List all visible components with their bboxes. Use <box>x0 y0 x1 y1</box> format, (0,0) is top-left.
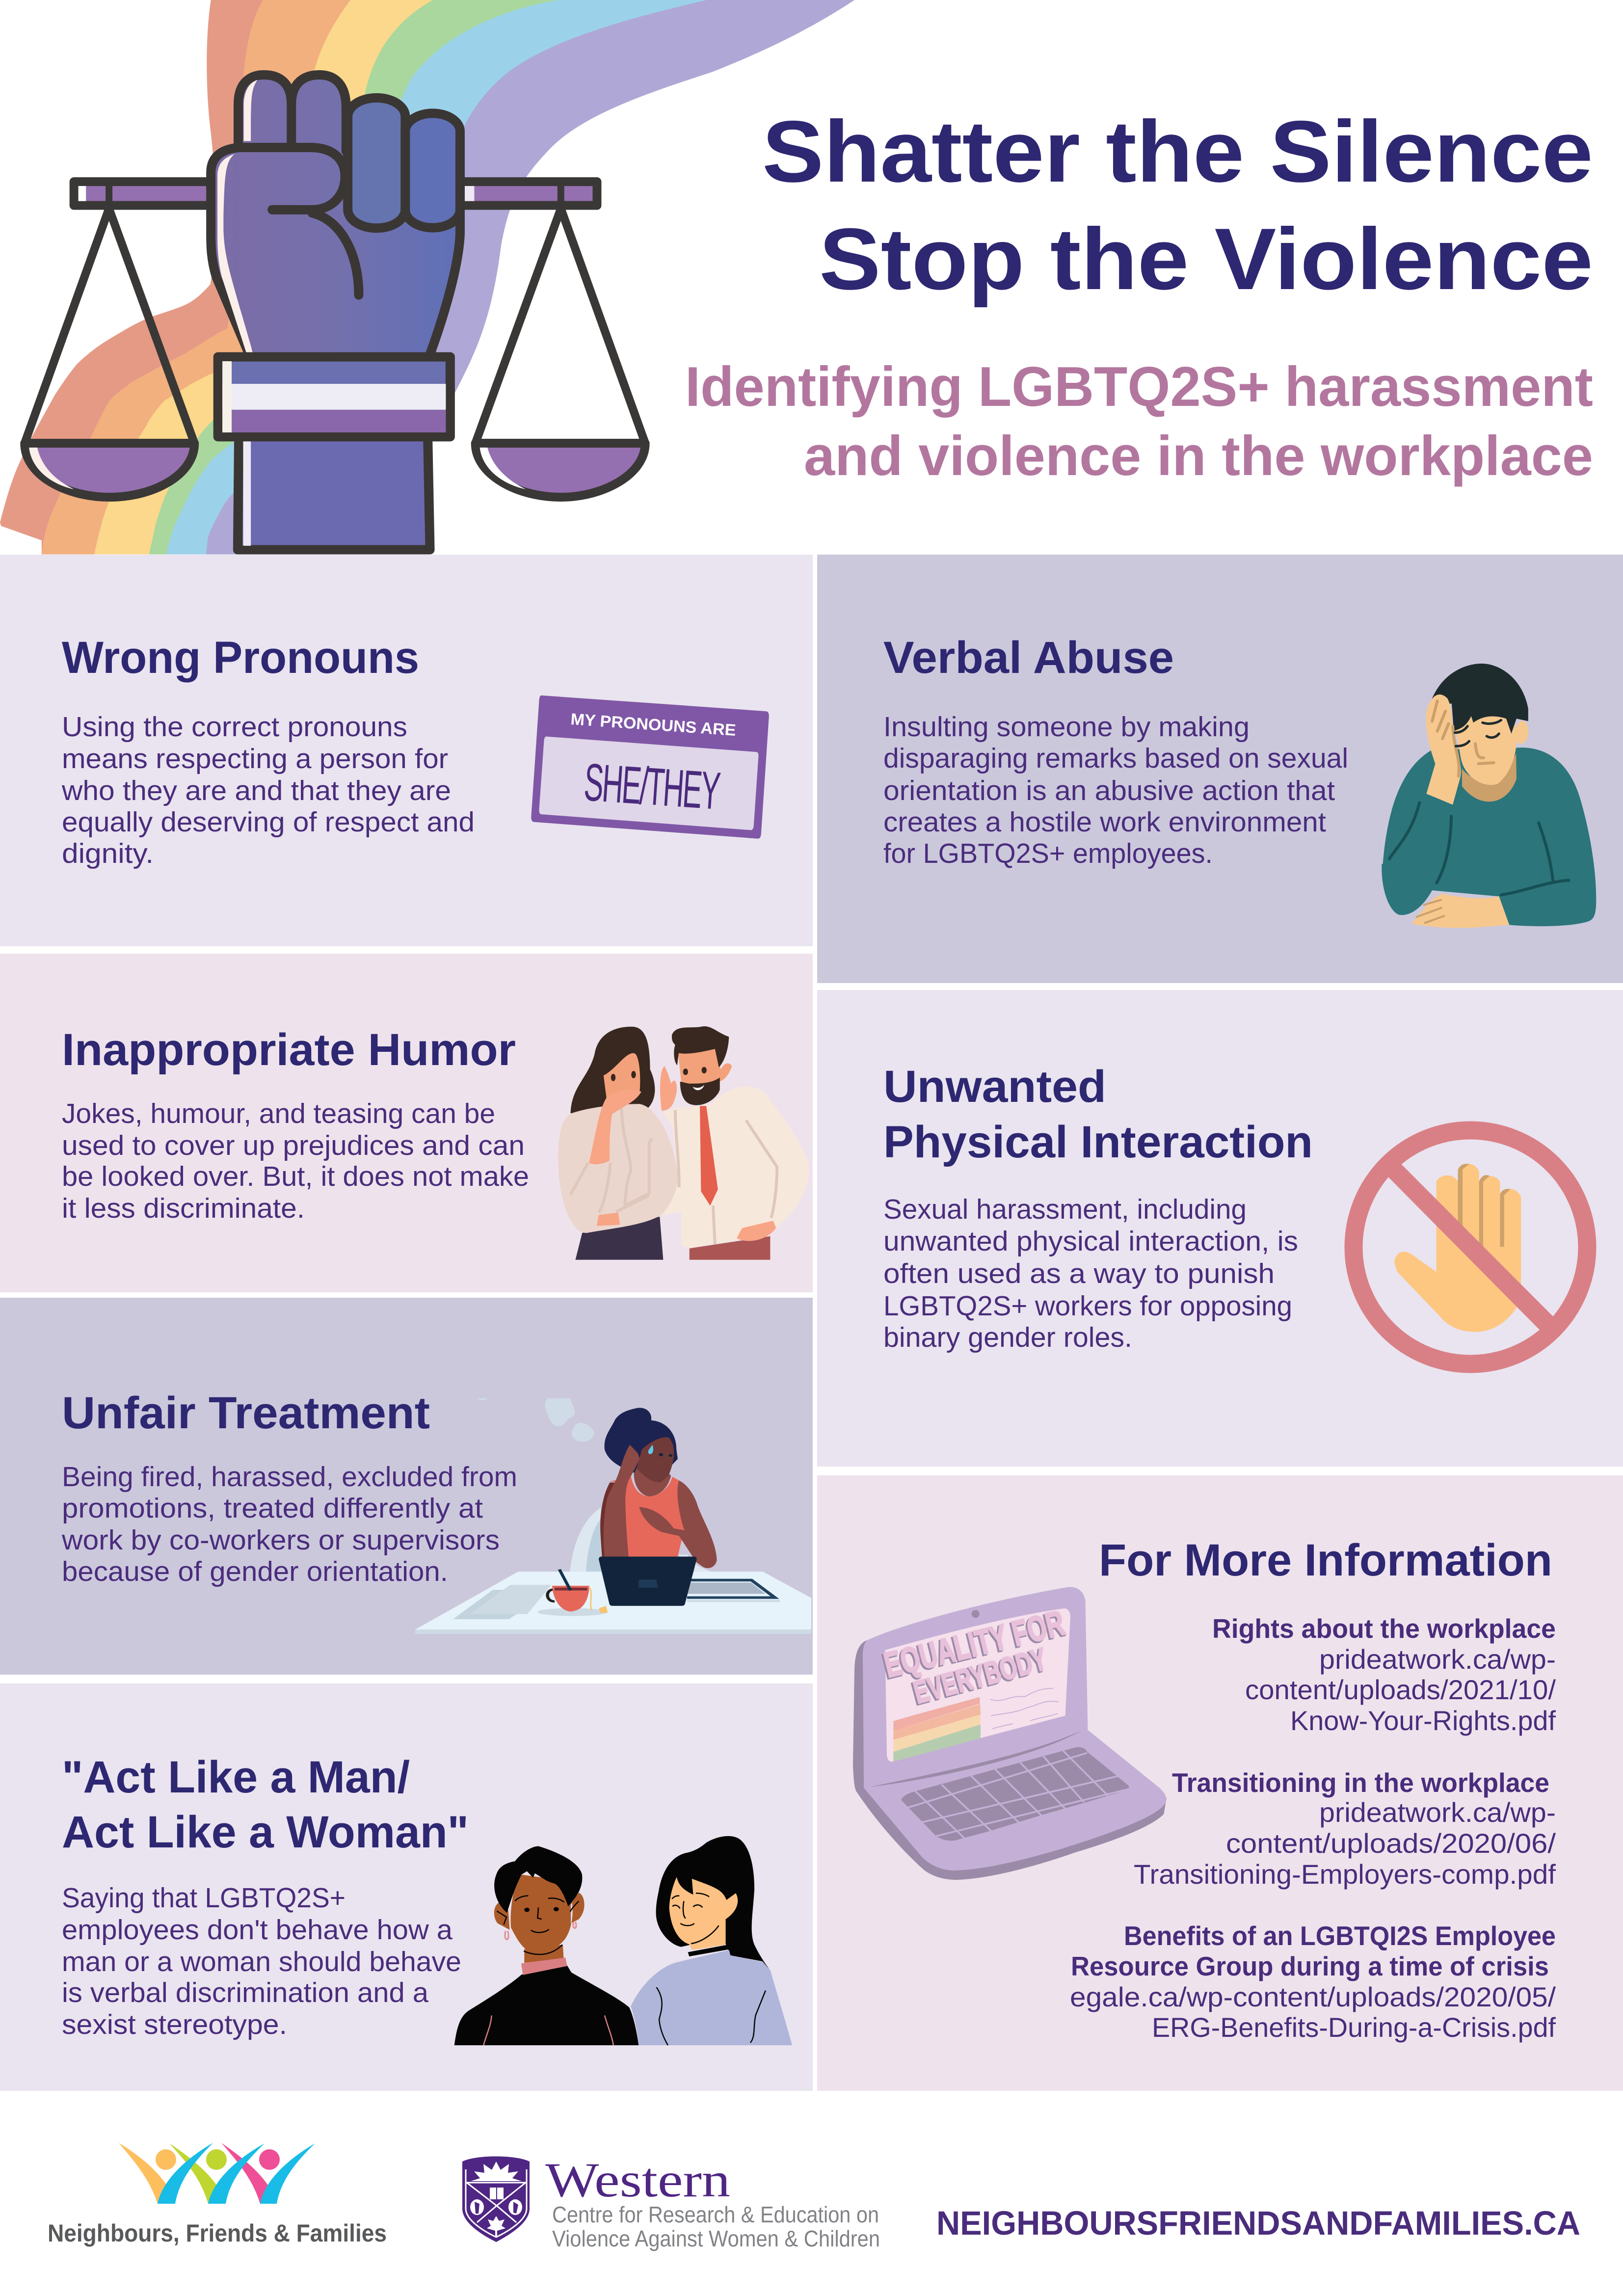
illustration: laptop with equality poster: EVERYBODY <box>908 1642 1049 1712</box>
icon: stop hand in prohibition sign <box>1354 1130 1587 1364</box>
resource: transitioning in the workplace: prideatwork.ca/wp- <box>1319 1797 1556 1828</box>
panel: unwanted physical interaction <box>817 990 1623 1467</box>
text: wrong pronouns: means respecting a person for <box>62 743 448 774</box>
resource: rights about the workplace: content/uploads/2021/10/ <box>1245 1674 1556 1705</box>
text: act like a man act like a woman: Saying that LGBTQ2S+ <box>62 1882 346 1914</box>
text: inappropriate humor: be looked over. But, it does not make <box>62 1161 529 1192</box>
heading: act like a man act like a woman: "Act Like a Man/ <box>62 1752 410 1802</box>
text: verbal abuse: creates a hostile work environment <box>883 806 1326 838</box>
heading: unwanted physical interaction <box>883 1062 1313 1167</box>
heading: unfair treatment: Unfair Treatment <box>62 1388 430 1438</box>
text: act like a man act like a woman: man or a woman should behave <box>62 1946 461 1977</box>
resource: rights about the workplace: Rights about the workplace <box>1212 1613 1556 1644</box>
text: act like a man act like a woman: sexist stereotype. <box>62 2009 287 2040</box>
resource: rights about the workplace: prideatwork.ca/wp- <box>1319 1644 1556 1675</box>
logo name: Neighbours, Friends & Families <box>48 2219 387 2247</box>
text: unfair treatment: promotions, treated differently at <box>62 1493 483 1524</box>
heading: act like a man act like a woman: Act Like a Woman" <box>62 1807 469 1857</box>
text: wrong pronouns: Using the correct pronouns <box>62 711 407 743</box>
text: unfair treatment: Being fired, harassed, excluded from <box>62 1461 517 1493</box>
text: wrong pronouns: dignity. <box>62 838 154 869</box>
heading: inappropriate humor: Inappropriate Humor <box>62 1025 516 1075</box>
heading: verbal abuse: Verbal Abuse <box>883 633 1174 683</box>
resource: benefits of an employee resource group <box>1070 1921 1556 2043</box>
text: unwanted physical interaction: binary gender roles. <box>883 1322 1132 1353</box>
logo mark <box>119 2143 315 2204</box>
illustration: two people <box>454 1836 792 2045</box>
resource: transitioning in the workplace: Transitioning in the workplace <box>1172 1767 1549 1798</box>
resource: transitioning in the workplace: content/uploads/2020/06/ <box>1226 1828 1556 1859</box>
subtitle <box>685 356 1593 487</box>
logo: neighbours friends and families <box>48 2143 387 2247</box>
text: act like a man act like a woman <box>62 1882 461 2040</box>
resource: benefits of an employee resource group: egale.ca/wp-content/uploads/2020/05/ <box>1070 1981 1556 2012</box>
logo: western university centre <box>462 2153 880 2251</box>
icon: pronoun badge: SHE/THEY <box>582 753 722 821</box>
text: inappropriate humor: Jokes, humour, and teasing can be <box>62 1098 495 1129</box>
icon: pronoun badge: MY PRONOUNS ARE <box>570 710 737 739</box>
text: unwanted physical interaction: LGBTQ2S+ workers for opposing <box>883 1290 1292 1322</box>
resource: benefits of an employee resource group: ERG-Benefits-During-a-Crisis.pdf <box>1152 2012 1556 2043</box>
text: verbal abuse: disparaging remarks based on sexual <box>883 743 1348 774</box>
panel: verbal abuse <box>817 555 1623 983</box>
text: unfair treatment: work by co-workers or supervisors <box>61 1524 500 1556</box>
illustration: laptop with equality poster: EQUALITY FOR <box>880 1603 1068 1685</box>
centre name: Centre for Research & Education on <box>552 2202 879 2227</box>
text: inappropriate humor <box>62 1098 529 1224</box>
balance scale <box>25 182 645 497</box>
resource: transitioning in the workplace <box>1134 1767 1556 1890</box>
text: act like a man act like a woman: is verbal discrimination and a <box>62 1977 428 2008</box>
panel: wrong pronouns <box>0 555 813 946</box>
text: inappropriate humor: it less discriminate. <box>62 1193 305 1224</box>
illustration: laptop with equality poster <box>853 1587 1167 1880</box>
resource: benefits of an employee resource group: Benefits of an LGBTQI2S Employee <box>1124 1921 1556 1951</box>
resource: rights about the workplace: Know-Your-Rights.pdf <box>1290 1705 1556 1736</box>
panel: unfair treatment <box>0 1298 813 1675</box>
text: wrong pronouns: equally deserving of respect and <box>62 806 475 838</box>
text: verbal abuse: Insulting someone by making <box>883 711 1250 743</box>
resource: benefits of an employee resource group: Resource Group during a time of crisis <box>1071 1951 1549 1981</box>
heading: unwanted physical interaction: Unwanted <box>883 1062 1106 1112</box>
text: unwanted physical interaction: Sexual harassment, including <box>883 1194 1247 1225</box>
illustration: laptop with equality poster: EQUALITY FOR <box>879 1604 1067 1687</box>
website url: NEIGHBOURSFRIENDSANDFAMILIES.CA <box>936 2204 1580 2242</box>
heading: wrong pronouns: Wrong Pronouns <box>62 633 419 683</box>
subtitle: and violence in the workplace <box>804 425 1593 487</box>
illustration: two coworkers whispering <box>558 1026 809 1260</box>
text: inappropriate humor: used to cover up prejudices and can <box>62 1130 525 1161</box>
illustration: rainbow and fist holding scales <box>0 0 854 555</box>
heading: unwanted physical interaction: Physical Interaction <box>883 1117 1313 1167</box>
icon: pronoun badge <box>531 695 769 839</box>
illustration: worried woman at desk <box>415 1398 811 1634</box>
text: verbal abuse: for LGBTQ2S+ employees. <box>883 838 1213 869</box>
panel: for more information <box>817 1475 1623 2091</box>
wordmark: Western <box>545 2153 730 2207</box>
title <box>762 103 1593 308</box>
heading: for more information: For More Information <box>1099 1535 1552 1585</box>
text: unwanted physical interaction: unwanted physical interaction, is <box>883 1226 1298 1257</box>
text: unfair treatment: because of gender orientation. <box>62 1556 448 1587</box>
text: wrong pronouns <box>61 711 475 869</box>
shield <box>462 2157 530 2242</box>
illustration: distressed man <box>1382 664 1596 928</box>
text: unfair treatment <box>61 1461 517 1587</box>
text: act like a man act like a woman: employees don't behave how a <box>62 1914 452 1946</box>
text: wrong pronouns: who they are and that they are <box>61 775 451 806</box>
text: verbal abuse: orientation is an abusive action that <box>883 775 1335 806</box>
centre name <box>552 2202 880 2251</box>
title: Stop the Violence <box>819 210 1593 308</box>
resource: rights about the workplace <box>1212 1613 1556 1736</box>
centre name: Violence Against Women & Children <box>552 2226 880 2251</box>
illustration: laptop with equality poster: EVERYBODY <box>910 1641 1050 1710</box>
panel: inappropriate humor <box>0 954 813 1292</box>
text: unwanted physical interaction <box>883 1194 1298 1353</box>
rainbow brush stroke <box>0 0 854 555</box>
text: verbal abuse <box>883 711 1348 869</box>
text: unwanted physical interaction: often used as a way to punish <box>883 1258 1275 1289</box>
title: Shatter the Silence <box>762 103 1593 200</box>
resource: transitioning in the workplace: Transitioning-Employers-comp.pdf <box>1134 1859 1556 1890</box>
panel: act like a man act like a woman <box>0 1683 813 2091</box>
subtitle: Identifying LGBTQ2S+ harassment <box>685 356 1593 418</box>
raised fist <box>211 75 460 550</box>
heading: act like a man act like a woman <box>62 1752 469 1857</box>
